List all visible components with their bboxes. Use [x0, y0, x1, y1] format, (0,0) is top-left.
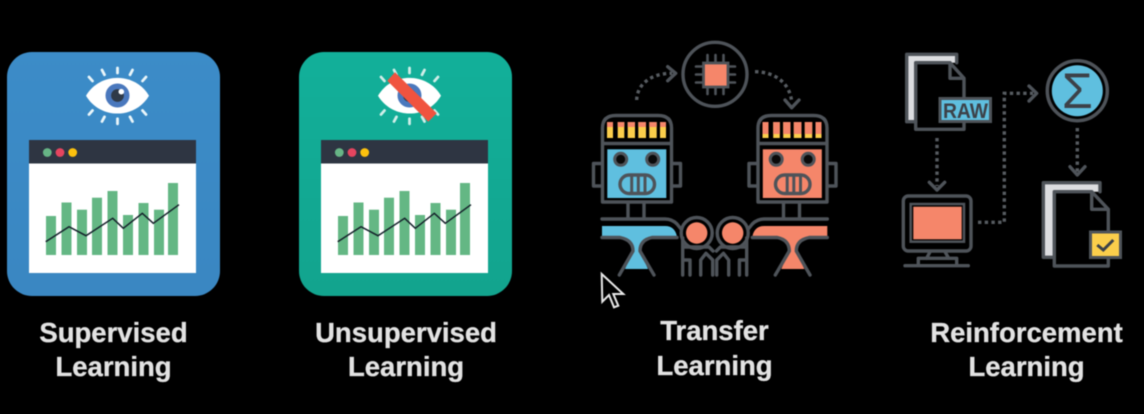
panel: unsupervised learning — [299, 52, 512, 296]
arrow: chip to right robot — [755, 72, 799, 108]
arrow: left robot to chip — [637, 67, 676, 100]
icon: sigma circle: Σ — [1062, 63, 1093, 119]
label: transfer learning: Transfer — [660, 315, 769, 346]
browser window chart — [321, 140, 488, 273]
label: reinforcement learning: Reinforcement — [930, 317, 1123, 348]
card background — [299, 52, 512, 296]
robot table — [748, 219, 827, 275]
label: supervised learning: Supervised — [39, 317, 188, 348]
bar chart — [338, 183, 470, 255]
trend line — [46, 205, 179, 242]
label: reinforcement learning: Learning — [968, 351, 1085, 382]
icon: raw data document — [907, 54, 990, 129]
icon: sigma circle — [1047, 61, 1107, 121]
robot mouth — [620, 175, 654, 194]
icon: open eye — [86, 68, 149, 124]
icon: checked document — [1043, 183, 1120, 266]
robot table — [602, 219, 681, 275]
bar chart — [46, 183, 178, 255]
left robot — [594, 116, 681, 275]
arrow: sigma to checked document — [1070, 128, 1085, 175]
trend line — [338, 205, 471, 242]
panel: reinforcement learning illustration — [903, 54, 1120, 266]
panel: supervised learning — [7, 52, 220, 296]
icon: crossed-out eye — [378, 68, 441, 124]
label: supervised learning: Learning — [55, 351, 172, 382]
robot hair — [762, 122, 822, 138]
icon: mouse cursor — [602, 274, 623, 307]
icon: computer monitor — [903, 196, 971, 266]
arrow: monitor to sigma — [978, 86, 1037, 222]
label: unsupervised learning: Learning — [348, 351, 464, 382]
icon: microchip in circle — [683, 42, 747, 106]
label: unsupervised learning: Unsupervised — [315, 317, 497, 348]
browser window chart — [29, 140, 196, 273]
icon: raw data document: RAW — [943, 100, 988, 123]
robot hair — [607, 122, 666, 138]
card background — [7, 52, 220, 296]
right robot — [748, 116, 836, 275]
robot face — [607, 149, 666, 198]
people in the middle — [681, 218, 748, 275]
robot face — [763, 149, 822, 198]
label: transfer learning: Learning — [656, 350, 773, 381]
panel: transfer learning illustration — [594, 42, 836, 275]
arrow: raw data to monitor — [929, 138, 945, 190]
robot mouth — [776, 175, 810, 194]
